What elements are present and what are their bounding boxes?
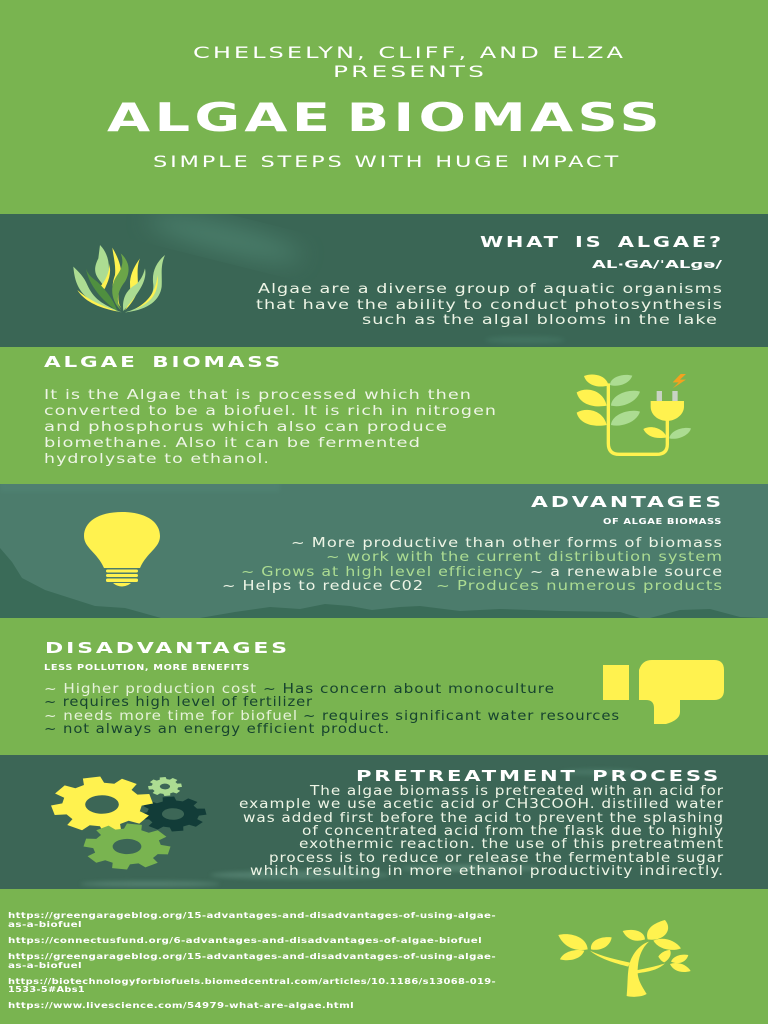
process description: of concentrated acid from the flask due to highly <box>302 824 724 839</box>
process description: process is to reduce or release the fermentable sugar <box>269 851 724 866</box>
advantages list: ~ Produces numerous products <box>436 579 723 594</box>
advantages list: ~ Grows at high level efficiency <box>241 565 524 580</box>
reference links: as-a-biofuel <box>8 961 82 970</box>
subheading: of algae biomass: OF ALGAE BIOMASS <box>603 517 722 526</box>
description text: Algae are a diverse group of aquatic organisms <box>258 282 723 297</box>
description text: such as the algal blooms in the lake <box>362 313 718 328</box>
disadvantages list: ~ requires significant water resources <box>303 709 620 724</box>
tagline: SIMPLE STEPS WITH HUGE IMPACT <box>153 152 621 171</box>
heading: pretreatment process: PRETREATMENT PROCESS <box>356 767 721 785</box>
advantages list <box>222 536 723 594</box>
disadvantages list: ~ Has concern about monoculture <box>263 682 555 697</box>
body text: and phosphorus which also can produce <box>44 420 448 435</box>
reference links: https://greengarageblog.org/15-advantages-and-disadvantages-of-using-algae- <box>8 952 496 961</box>
body text: hydrolysate to ethanol. <box>44 452 270 467</box>
process description: exothermic reaction. the use of this pretreatment <box>299 837 724 852</box>
description text <box>256 282 723 328</box>
disadvantages list: ~ Higher production cost <box>44 682 257 697</box>
gear: yellow <box>42 772 162 837</box>
pronunciation: AL·GA/ˈALɡə/ <box>592 258 724 271</box>
heading: algae biomass: ALGAE BIOMASS <box>44 353 283 371</box>
advantages list: ~ work with the current distribution system <box>326 550 723 565</box>
icon: gears <box>42 772 210 873</box>
process description <box>239 784 724 879</box>
process description: which resulting in more ethanol productivity indirectly. <box>250 864 724 879</box>
panel: pretreatment process <box>0 755 768 889</box>
process description: was added first before the acid to prevent the splashing <box>243 811 724 826</box>
gear: green <box>77 820 177 873</box>
process description: The algae biomass is pretreated with an acid for <box>309 784 724 799</box>
subheading: less pollution: LESS POLLUTION, MORE BENEFITS <box>44 663 250 672</box>
icon: seaweed <box>73 245 165 312</box>
reference links: 1533-5#Abs1 <box>8 985 85 994</box>
icon: plant with plug <box>577 374 691 454</box>
title: ALGAE BIOMASS <box>107 96 664 141</box>
panel: what is algae <box>0 207 768 347</box>
heading: advantages: ADVANTAGES <box>531 493 724 511</box>
reference links: as-a-biofuel <box>8 920 82 929</box>
disadvantages list: ~ not always an energy efficient product. <box>44 722 390 737</box>
body text: It is the Algae that is processed which then <box>44 388 472 403</box>
mountain silhouettes <box>0 548 768 618</box>
advantages list: ~ More productive than other forms of biomass <box>291 536 723 551</box>
process description: example we use acetic acid or CH3COOH. distilled water <box>239 797 724 812</box>
body text <box>44 388 497 467</box>
disadvantages list <box>44 682 620 737</box>
icon: tree <box>558 920 691 997</box>
header <box>107 43 664 171</box>
icon: light bulb <box>84 512 160 586</box>
header subtitle: authors: CHELSELYN, CLIFF, AND ELZA <box>193 43 626 62</box>
heading: disadvantages: DISADVANTAGES <box>45 639 290 657</box>
disadvantages list: ~ requires high level of fertilizer <box>44 695 313 710</box>
panel: advantages <box>0 480 768 618</box>
heading: what is algae: WHAT IS ALGAE? <box>480 233 724 251</box>
body text: biomethane. Also it can be fermented <box>44 436 421 451</box>
reference links <box>8 911 496 1010</box>
panel: references <box>8 911 691 1010</box>
gear: small light green <box>146 776 184 797</box>
advantages list: ~ Helps to reduce C02 <box>222 579 424 594</box>
reference links: https://www.livescience.com/54979-what-are-algae.html <box>8 1001 354 1010</box>
reference links: https://connectusfund.org/6-advantages-and-disadvantages-of-algae-biofuel <box>8 936 482 945</box>
description text: that have the ability to conduct photosynthesis <box>256 298 723 313</box>
header subtitle: presents: PRESENTS <box>333 62 487 81</box>
reference links: https://biotechnologyforbiofuels.biomedcentral.com/articles/10.1186/s13068-019- <box>8 977 496 986</box>
panel: algae biomass <box>44 353 691 467</box>
gear: dark <box>136 795 210 833</box>
panel: disadvantages <box>44 639 724 737</box>
icon: thumbs down <box>603 660 724 724</box>
body text: converted to be a biofuel. It is rich in nitrogen <box>44 404 497 419</box>
advantages list: ~ a renewable source <box>530 565 723 580</box>
disadvantages list: ~ needs more time for biofuel <box>44 709 298 724</box>
reference links: https://greengarageblog.org/15-advantages-and-disadvantages-of-using-algae- <box>8 911 496 920</box>
